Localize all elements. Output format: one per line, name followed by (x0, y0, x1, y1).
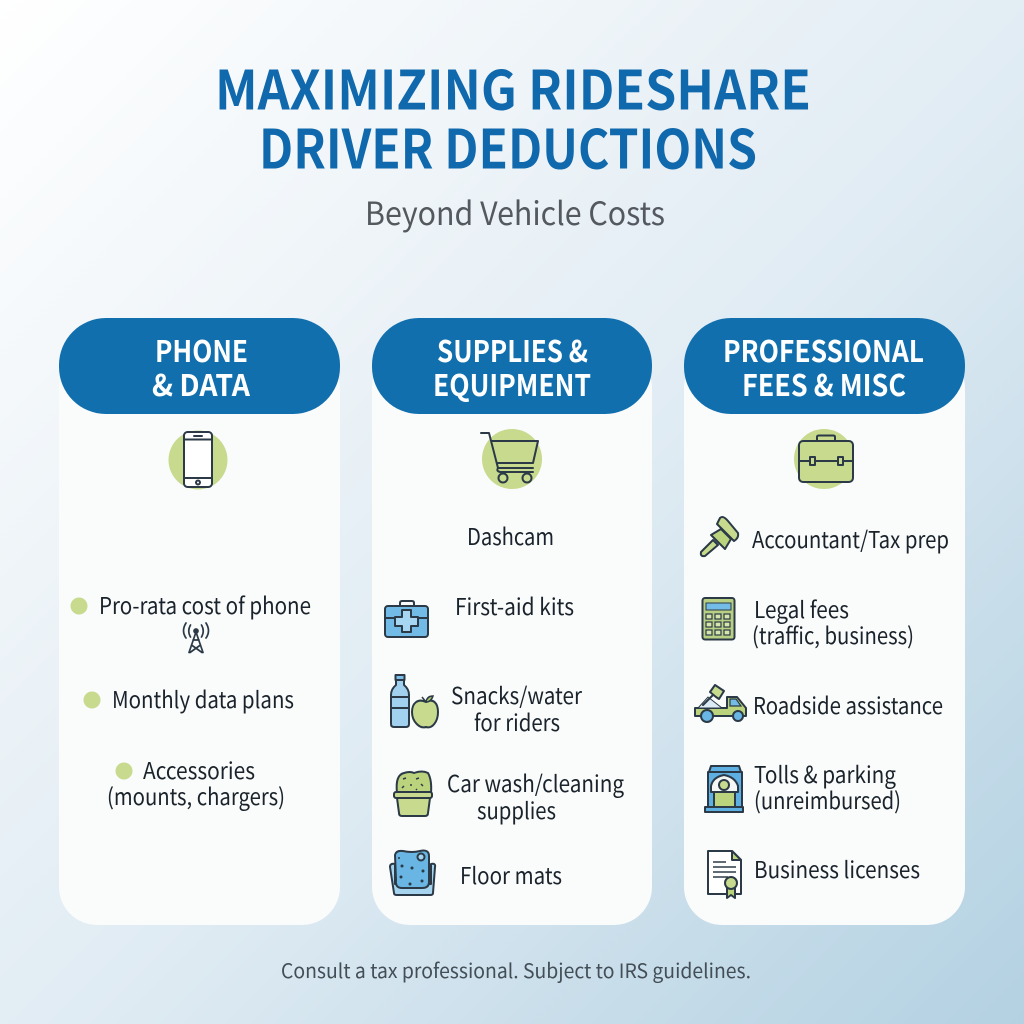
heading: phone and data (59, 318, 340, 414)
list item: business licenses: Business licenses (754, 851, 920, 885)
heading: phone and data: & DATA (152, 361, 251, 405)
list item: accessories: Accessories (143, 752, 255, 786)
icon: toll booth (705, 766, 743, 812)
heading: professional fees and misc (684, 318, 965, 414)
list item: legal fees (702, 591, 914, 651)
list item: accountant and tax prep: Accountant/Tax prep (752, 521, 949, 555)
title: DRIVER DEDUCTIONS (259, 106, 757, 184)
icon: smartphone (168, 430, 228, 490)
icon: certificate document (708, 851, 741, 898)
icon: tow truck (695, 685, 746, 722)
icon: shopping cart (481, 429, 542, 489)
panel: supplies and equipment (372, 318, 652, 925)
title (215, 46, 811, 184)
heading: supplies and equipment: EQUIPMENT (433, 361, 591, 405)
list item: accessories: (mounts, chargers) (107, 778, 285, 812)
list item: snacks and water: for riders (474, 704, 560, 738)
list item: monthly data plans: Monthly data plans (112, 681, 294, 715)
icon: signal tower (184, 623, 208, 652)
panel: professional fees and misc (684, 318, 965, 925)
list item: roadside assistance: Roadside assistance (753, 687, 943, 721)
icon: water bottle and apple (391, 675, 438, 727)
list item: legal fees: (traffic, business) (752, 617, 914, 651)
icon: first-aid kit (385, 601, 428, 637)
list item: roadside assistance (695, 685, 943, 722)
icon: calculator (702, 598, 734, 640)
heading: phone and data: PHONE (155, 327, 248, 371)
list item: car wash and cleaning supplies: Car wash/cleaning (447, 765, 624, 799)
heading: professional fees and misc: PROFESSIONAL (723, 327, 924, 371)
list item: snacks and water: Snacks/water (451, 677, 582, 711)
icon: floor mat (390, 851, 435, 895)
list item: dashcam: Dashcam (467, 518, 554, 552)
list item: tolls and parking (705, 756, 901, 816)
list item: car wash and cleaning supplies: supplies (477, 792, 556, 826)
list item: snacks and water (391, 675, 582, 738)
list item: tolls and parking: (unreimbursed) (754, 782, 901, 816)
icon: pin (701, 517, 738, 556)
heading: professional fees and misc: FEES & MISC (742, 361, 906, 405)
list item: accessories (107, 752, 285, 812)
list item: pro-rata cost of phone: Pro-rata cost of phone (99, 587, 311, 621)
subtitle: Beyond Vehicle Costs (365, 189, 665, 235)
list item: tolls and parking: Tolls & parking (754, 756, 896, 790)
list item: first-aid kits (385, 588, 574, 637)
list item: floor mats (390, 851, 562, 895)
footer note: Consult a tax professional. Subject to IRS guidelines. (281, 955, 751, 984)
heading: supplies and equipment (372, 318, 652, 414)
panel: phone and data (59, 318, 340, 925)
icon: briefcase (794, 429, 854, 489)
list item: business licenses (708, 851, 920, 898)
list item: legal fees: Legal fees (754, 591, 849, 625)
list item: first-aid kits: First-aid kits (455, 588, 574, 622)
title: MAXIMIZING RIDESHARE (215, 46, 811, 126)
list item: floor mats: Floor mats (460, 857, 562, 891)
icon: sponge in bucket (394, 772, 432, 816)
list item: car wash and cleaning supplies (394, 765, 624, 826)
list item: accountant and tax prep (701, 517, 949, 556)
heading: supplies and equipment: SUPPLIES & (437, 327, 588, 371)
